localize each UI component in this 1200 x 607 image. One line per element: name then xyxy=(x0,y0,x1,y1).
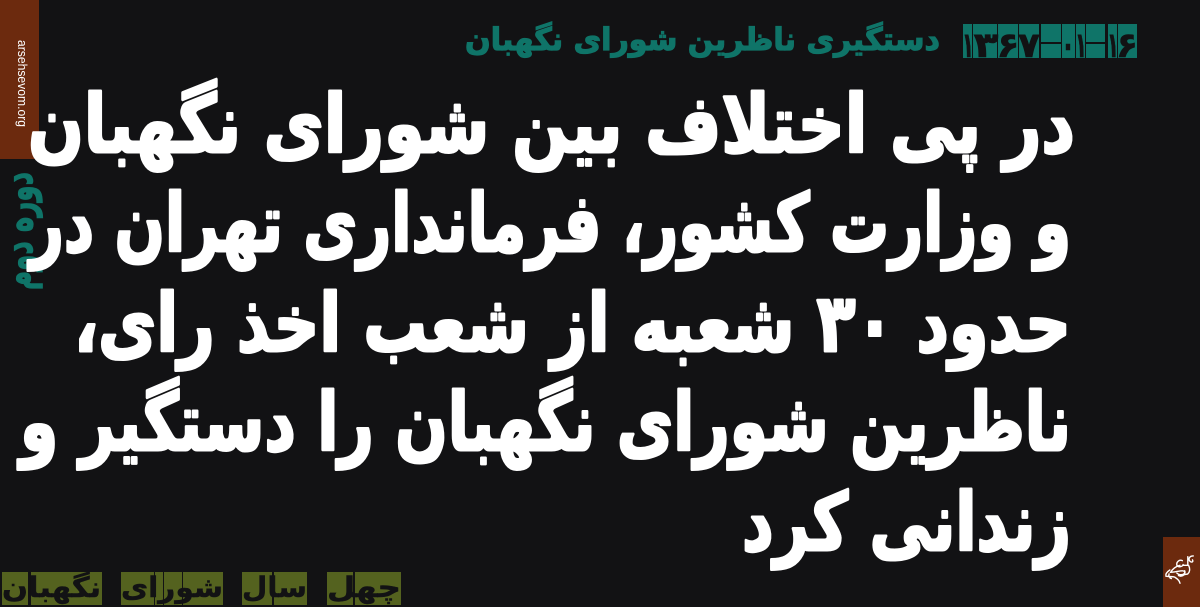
main statement: حدود ۳۰ شعبه از شعب اخذ رای، xyxy=(74,277,1071,371)
icon: calligraphic logo xyxy=(1166,556,1193,583)
site url: arsehsevom.org xyxy=(15,40,29,127)
panel: top-left site tab xyxy=(0,0,39,159)
date badge xyxy=(962,24,1138,66)
main statement xyxy=(17,78,1075,570)
date digits: ۱ xyxy=(962,26,974,66)
footer series title: شورای xyxy=(121,571,223,604)
date digits: ۰ xyxy=(1061,26,1075,66)
heading: دستگیری ناظرین شورای نگهبان xyxy=(465,21,940,58)
date digits: ۱ xyxy=(1107,26,1119,66)
footer series title: سال xyxy=(242,571,307,604)
footer series title: چهل xyxy=(327,571,401,604)
logo tab xyxy=(1163,537,1200,607)
date digits: ۳ xyxy=(974,26,998,66)
date digits xyxy=(962,26,1138,66)
date digits: ۷ xyxy=(1018,26,1040,66)
footer series title xyxy=(2,571,401,605)
date digits: ۶ xyxy=(996,26,1020,66)
date digits: ۱ xyxy=(1075,26,1087,66)
footer series title: نگهبان xyxy=(2,571,101,604)
date dashes xyxy=(1040,42,1106,44)
date digits: ۶ xyxy=(1116,26,1138,66)
main statement: زندانی کرد xyxy=(742,476,1071,570)
